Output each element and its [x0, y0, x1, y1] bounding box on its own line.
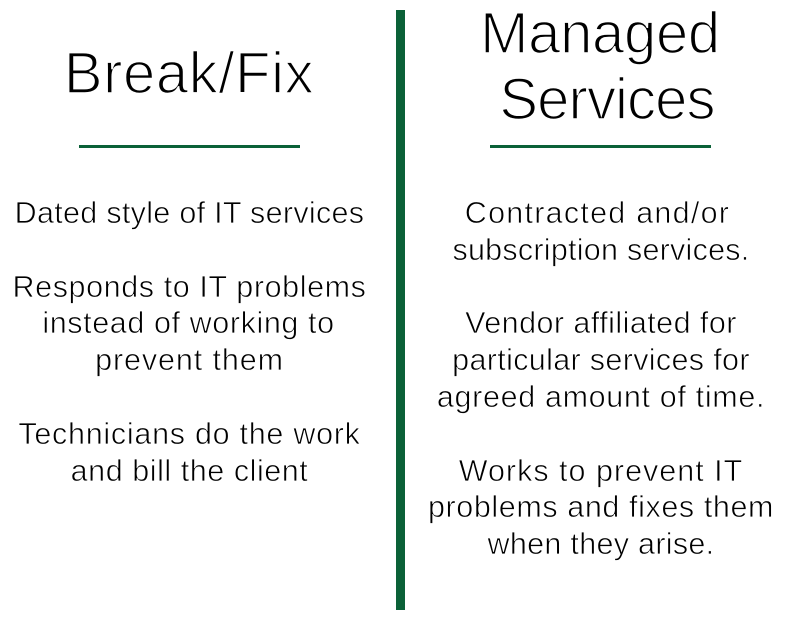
text block: Break/Fix points: prevent them: [95, 343, 284, 377]
heading: Managed Services: [480, 1, 720, 132]
text block: Break/Fix points: and bill the client: [71, 454, 308, 488]
text block: Break/Fix points: [12, 196, 366, 488]
text block: Managed Services points: particular services for: [452, 343, 750, 377]
text block: Managed Services points: subscription services.: [452, 233, 750, 267]
heading: Managed Services: Managed: [480, 1, 720, 66]
text block: Break/Fix points: Responds to IT problems: [12, 270, 366, 304]
text block: Managed Services points: [428, 196, 774, 561]
text block: Managed Services points: problems and fixes them: [428, 490, 774, 524]
heading: Break/Fix: Break/Fix: [64, 41, 314, 106]
heading underline left: [79, 145, 300, 148]
text block: Managed Services points: Works to prevent IT: [459, 454, 743, 488]
text block: Managed Services points: Contracted and/or: [465, 196, 730, 230]
text block: Managed Services points: agreed amount of time.: [437, 380, 765, 414]
text block: Break/Fix points: Technicians do the work: [18, 417, 361, 451]
center divider: [396, 10, 405, 610]
text block: Managed Services points: Vendor affiliated for: [465, 306, 737, 340]
heading underline right: [490, 145, 711, 148]
text block: Managed Services points: when they arise.: [488, 527, 714, 561]
text block: Break/Fix points: instead of working to: [42, 306, 335, 340]
heading: Managed Services: Services: [499, 67, 715, 132]
text block: Break/Fix points: Dated style of IT services: [15, 196, 364, 230]
